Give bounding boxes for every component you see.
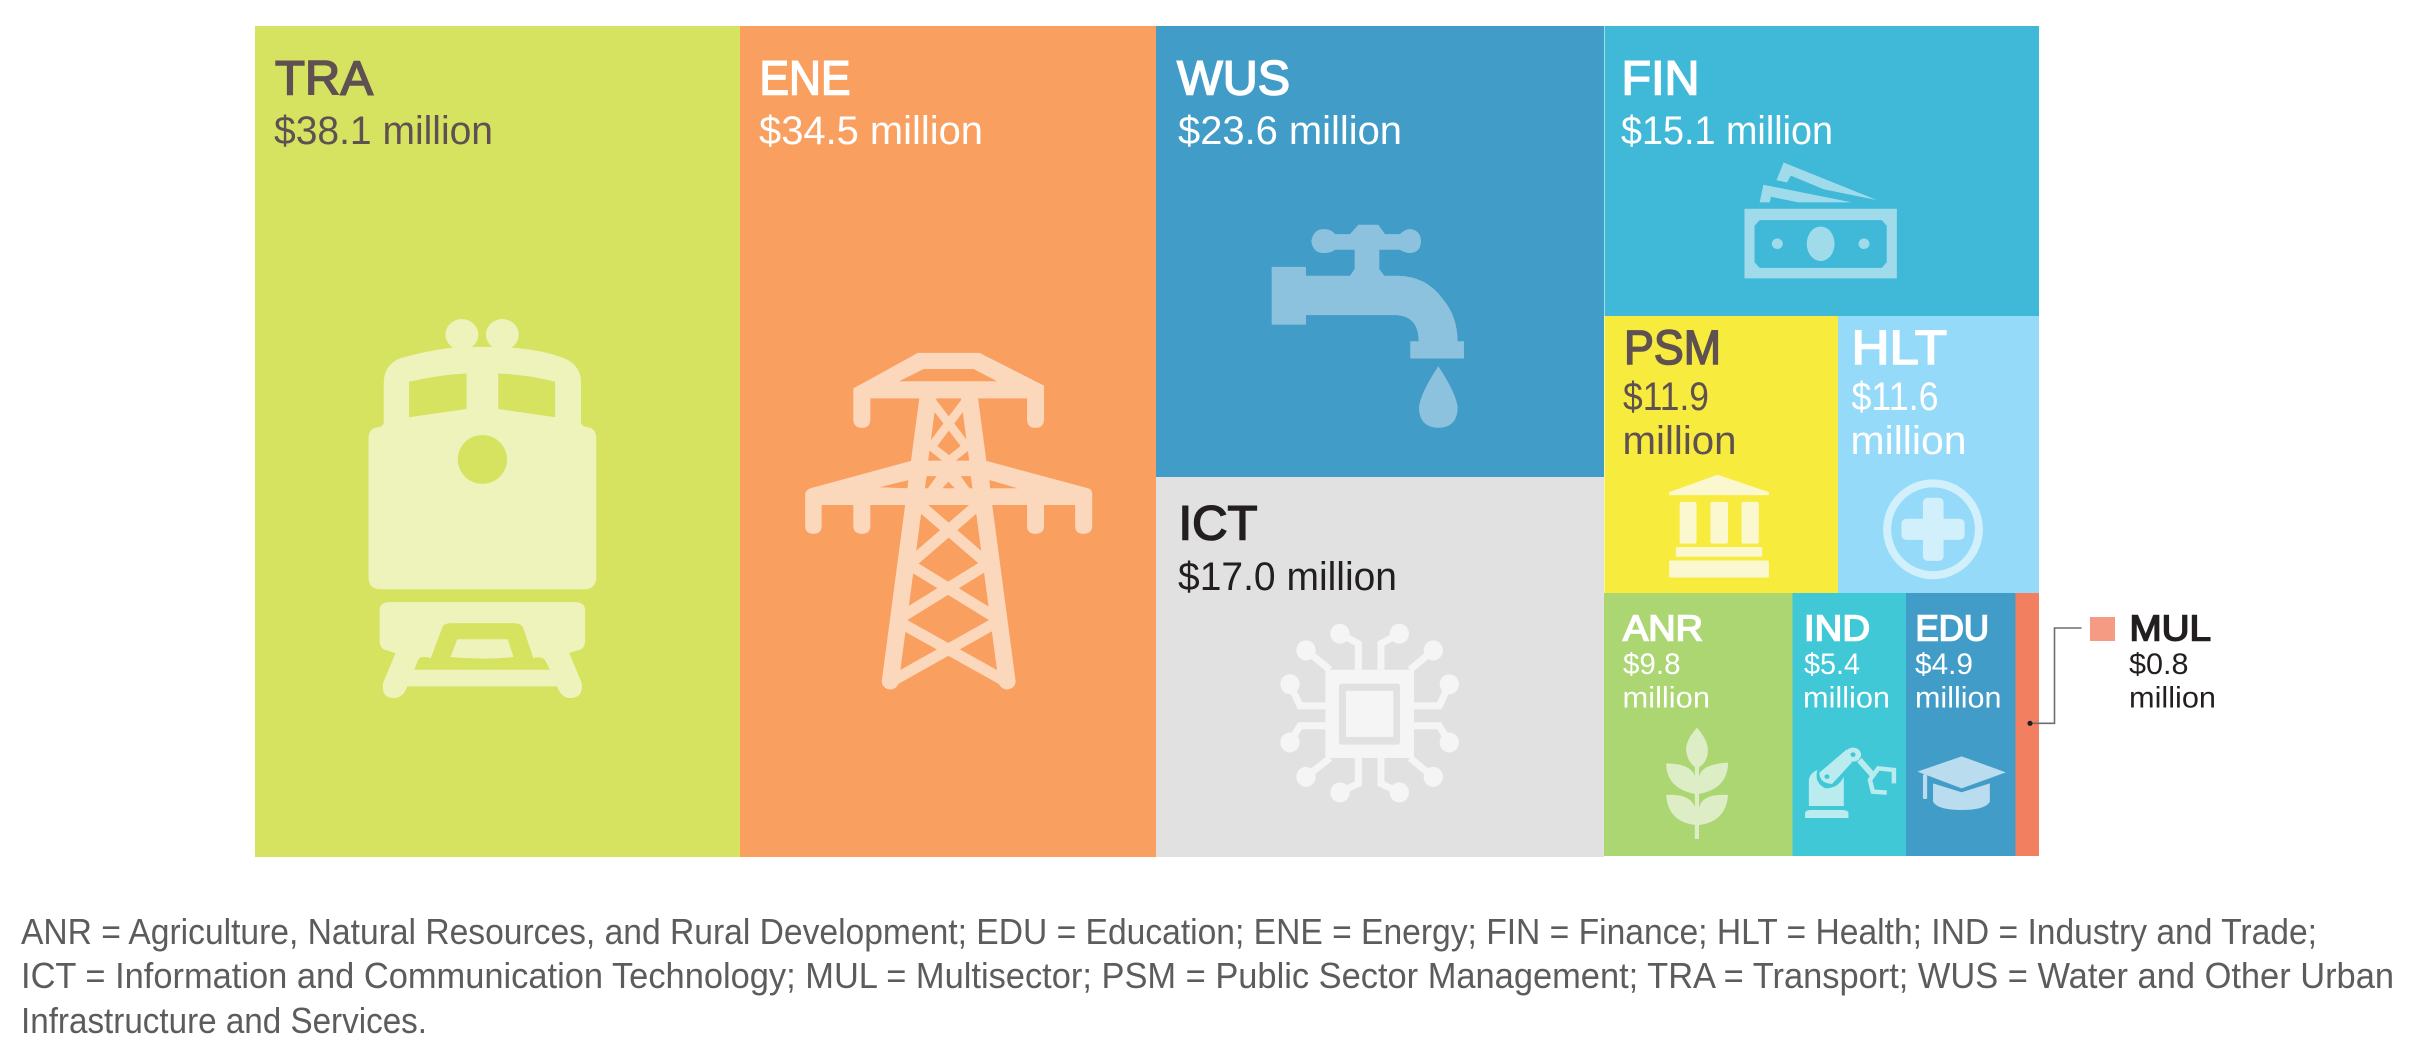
value: IND: million: [1803, 682, 1890, 714]
abbreviations footnote: Infrastructure and Services.: [21, 1000, 427, 1041]
leader dot: [2027, 721, 2033, 726]
heading: WUS: WUS: [1177, 52, 1290, 106]
value: ANR: million: [1622, 682, 1710, 714]
icon: graduation cap: [1917, 756, 2006, 810]
heading: IND: IND: [1804, 608, 1870, 648]
heading: MUL: MUL: [2130, 608, 2211, 648]
value: PSM: $11.9: [1623, 375, 1709, 419]
heading: FIN: FIN: [1622, 52, 1700, 106]
panel: FIN: [1604, 26, 2039, 316]
value: WUS: $23.6 million: [1178, 109, 1402, 153]
panel: WUS: [1156, 26, 1604, 477]
heading: EDU: EDU: [1916, 608, 1989, 648]
panel: EDU: [1906, 593, 2016, 856]
callout: MUL: [2027, 608, 2216, 726]
value: IND: $5.4: [1804, 648, 1860, 681]
value: ANR: $9.8: [1623, 648, 1680, 681]
icon: plant: [1666, 728, 1728, 839]
icon: water tap: [1272, 225, 1464, 428]
icon: microchip: [1280, 624, 1459, 802]
value: ENE: $34.5 million: [759, 109, 983, 153]
icon: medical cross: [1887, 483, 1979, 575]
treemap chart: [255, 26, 2039, 857]
value: EDU: $4.9: [1915, 648, 1973, 681]
panel: MUL: [2016, 593, 2039, 856]
panel: PSM: [1604, 316, 1838, 593]
heading: ANR: ANR: [1623, 608, 1703, 648]
heading: ENE: ENE: [760, 52, 850, 106]
icon: robot arm: [1805, 748, 1894, 818]
icon: transmission tower: [805, 353, 1092, 681]
panel: ICT: [1156, 477, 1604, 857]
icon: government building: [1669, 475, 1769, 577]
legend swatch: [2090, 617, 2115, 641]
value: TRA: $38.1 million: [274, 109, 493, 153]
panel: HLT: [1838, 316, 2039, 593]
icon: train: [369, 319, 596, 698]
panel: IND: [1792, 593, 1906, 856]
panel: ANR: [1604, 593, 1792, 856]
leader line: [2030, 628, 2082, 723]
heading: PSM: PSM: [1624, 322, 1721, 375]
value: MUL: $0.8: [2129, 648, 2188, 681]
value: HLT: $11.6: [1852, 375, 1938, 419]
value: EDU: million: [1915, 682, 2002, 714]
heading: HLT: HLT: [1852, 322, 1947, 375]
value: HLT: million: [1850, 419, 1966, 463]
panel: ENE: [740, 26, 1156, 857]
heading: TRA: TRA: [275, 52, 373, 106]
abbreviations footnote: ANR = Agriculture, Natural Resources, and Rural Development; EDU = Education; ENE = Energy; FIN = Finance; HLT = Health; IND = Industry and Trade;: [21, 911, 2317, 952]
icon: banknotes: [1744, 163, 1897, 278]
panel: TRA: [255, 26, 740, 857]
heading: ICT: ICT: [1178, 498, 1258, 550]
value: PSM: million: [1622, 419, 1736, 463]
value: ICT: $17.0 million: [1178, 555, 1397, 599]
value: FIN: $15.1 million: [1621, 109, 1833, 153]
value: MUL: million: [2129, 682, 2216, 714]
